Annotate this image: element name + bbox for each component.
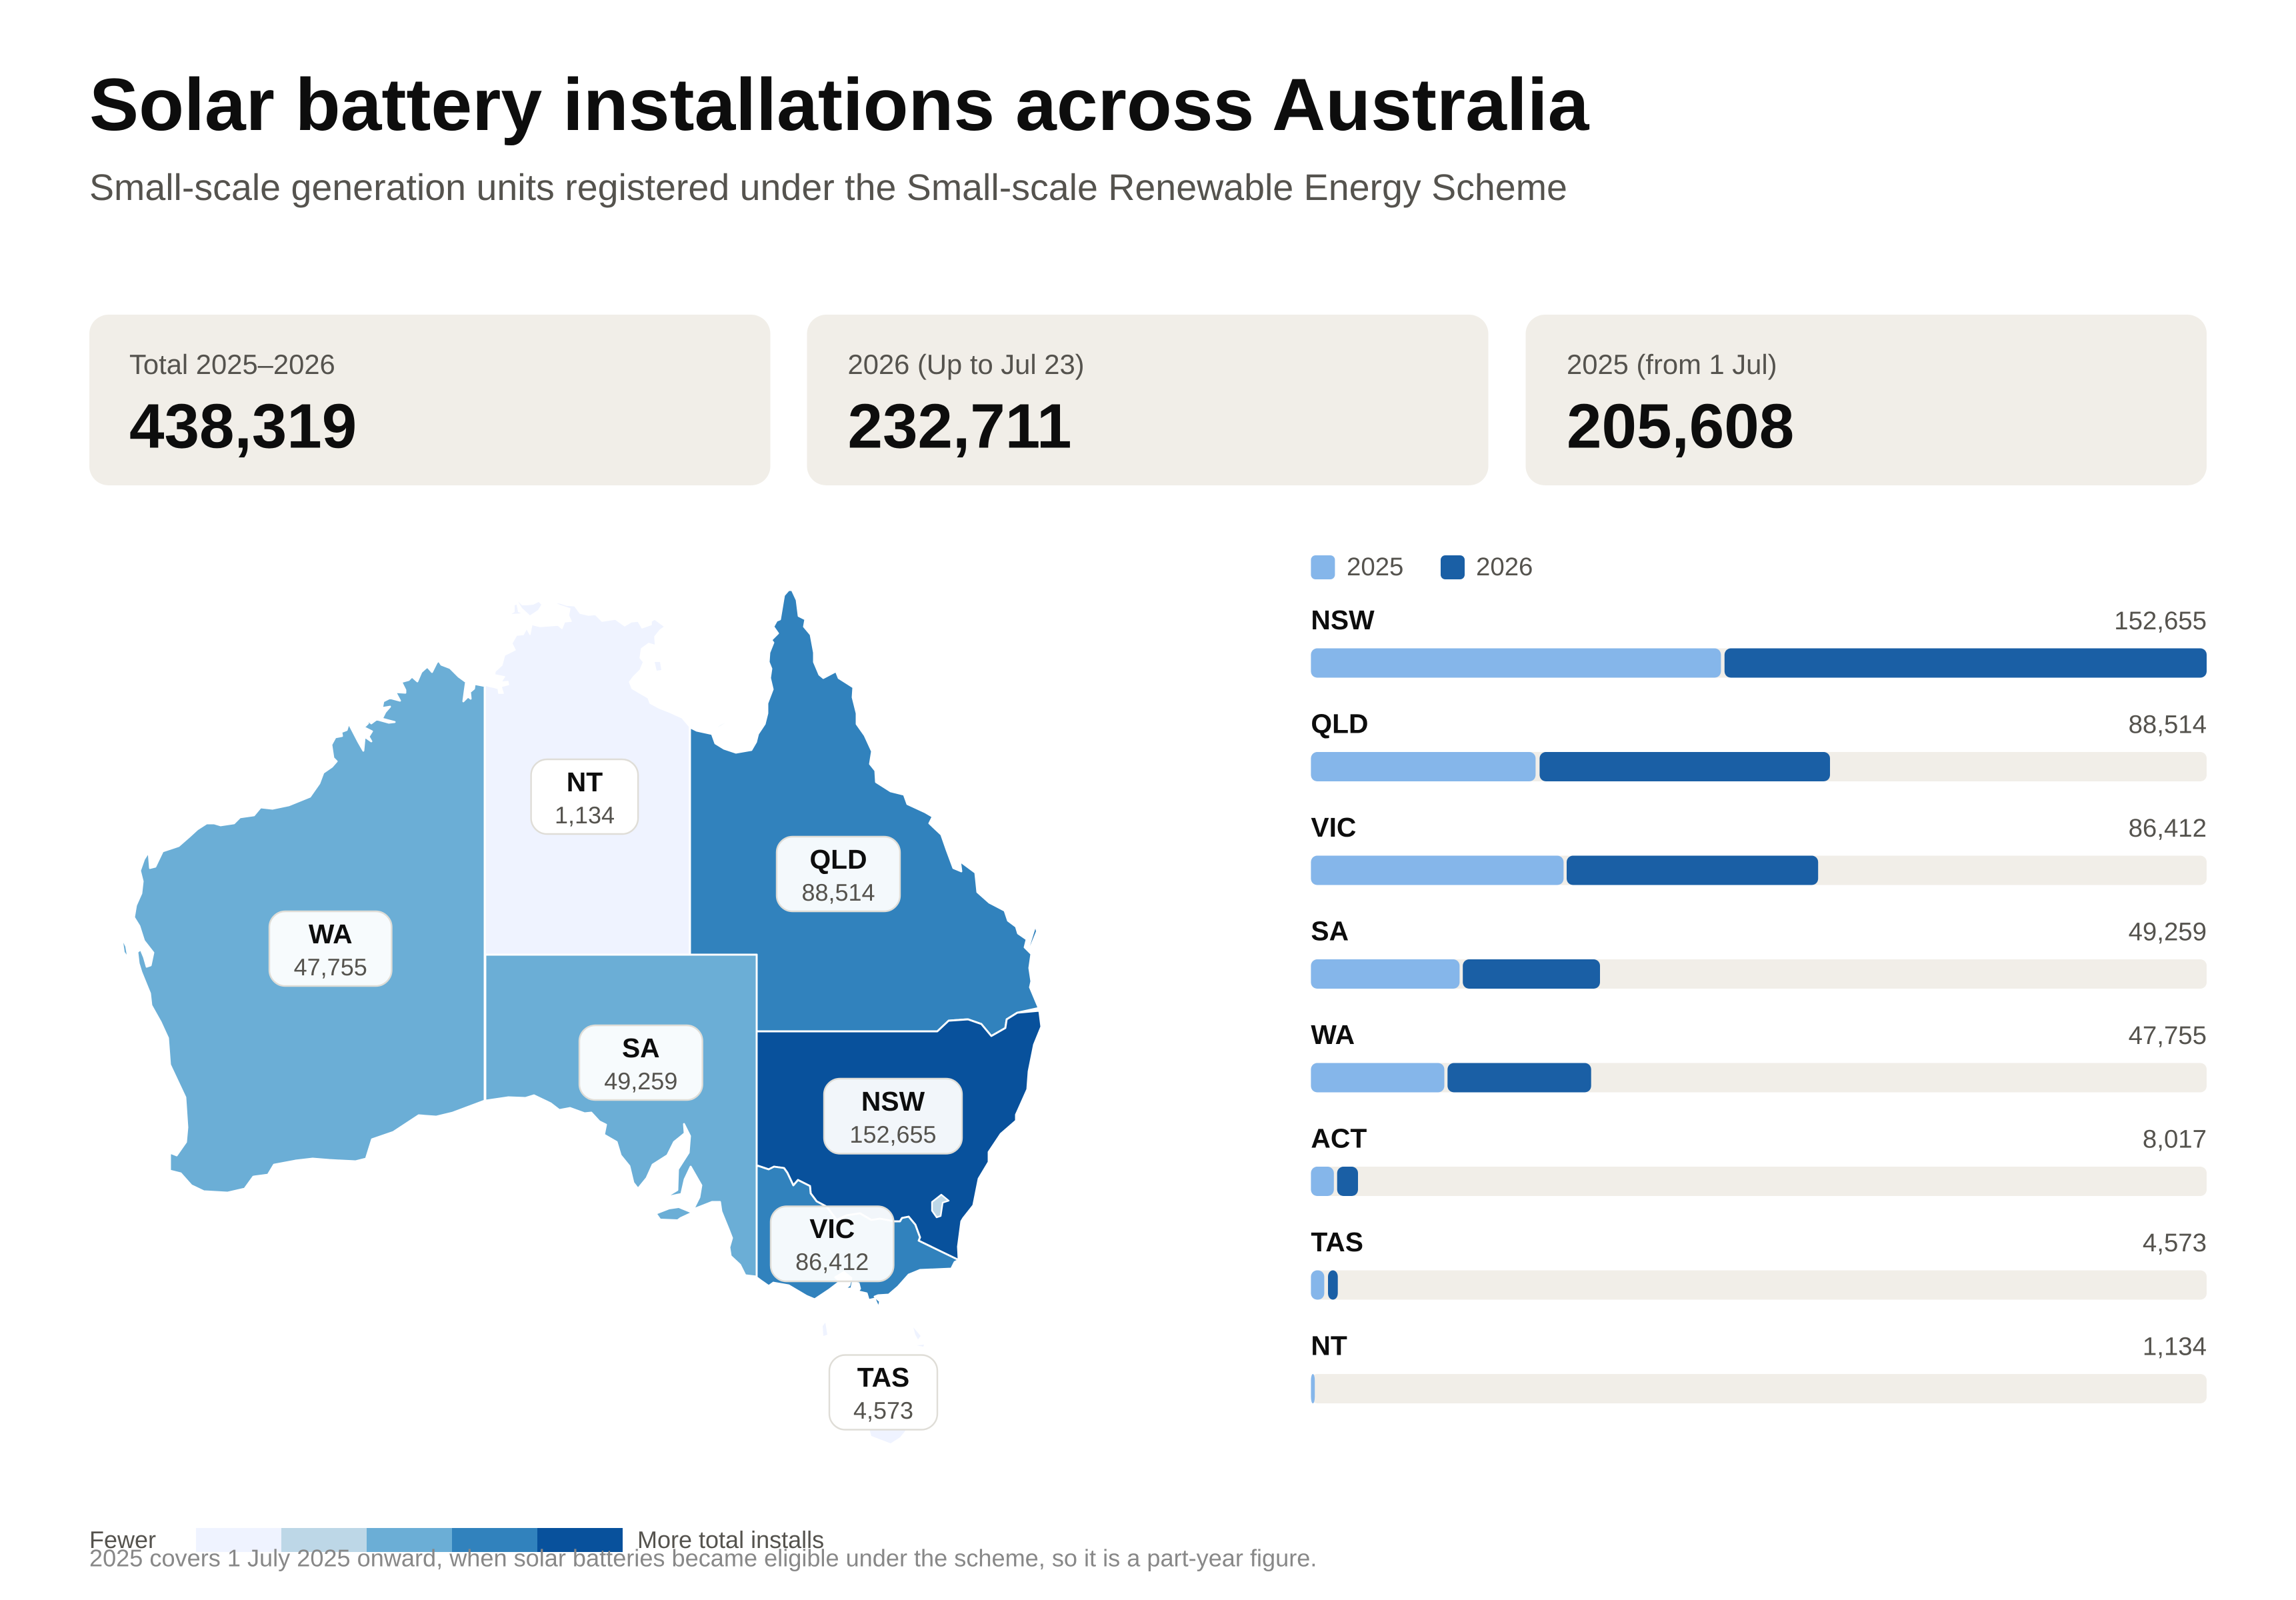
map label: VIC: 86,412 — [795, 1248, 869, 1275]
bar row: QLD: 88,514 — [2129, 711, 2207, 739]
subtitle: Small-scale generation units registered under the Small-scale Renewable Energy Scheme — [89, 167, 1567, 208]
state: Tasmania — [823, 1323, 930, 1443]
bar row: NT: NT — [1311, 1331, 1347, 1361]
map colour legend: More total installs — [637, 1526, 824, 1553]
bar row: SA — [1311, 916, 2207, 989]
state: Victoria — [757, 1165, 959, 1308]
bar row: TAS — [1311, 1227, 2207, 1300]
map label: NSW: NSW — [861, 1086, 925, 1117]
map label: TAS: TAS — [857, 1362, 909, 1393]
bar row: TAS: 4,573 — [2143, 1229, 2207, 1257]
map label: SA: 49,259 — [604, 1067, 677, 1095]
bar row: WA: 47,755 — [2129, 1021, 2207, 1050]
panel: KPI 2026: 2026 (Up to Jul 23) — [848, 349, 1085, 380]
bar chart legend: 2026 — [1476, 553, 1533, 581]
panel: KPI 2025: 2025 (from 1 Jul) — [1567, 349, 1777, 380]
map label: VIC — [771, 1207, 893, 1281]
bar row: NT — [1311, 1331, 2207, 1403]
panel: KPI total: 438,319 — [129, 392, 357, 461]
map colour legend — [89, 1526, 824, 1553]
map label: NSW — [824, 1079, 962, 1153]
bar row: SA: SA — [1311, 916, 1349, 947]
bar row: TAS: TAS — [1311, 1227, 1363, 1257]
map colour legend: Fewer — [89, 1526, 156, 1553]
map label: TAS: 4,573 — [853, 1397, 913, 1424]
bar row: QLD: QLD — [1311, 708, 1369, 739]
bar row: NSW — [1311, 605, 2207, 677]
bar row: WA: WA — [1311, 1019, 1355, 1050]
map label: NSW: 152,655 — [849, 1121, 937, 1148]
map label: WA: WA — [309, 919, 353, 949]
map label: QLD: QLD — [809, 844, 867, 875]
bar row: SA: 49,259 — [2129, 917, 2207, 947]
state: Western Australia — [123, 661, 485, 1193]
panel: KPI 2026 — [807, 315, 1488, 485]
map label: QLD — [777, 837, 900, 911]
bar row: WA — [1311, 1019, 2207, 1092]
map label: NT: NT — [567, 767, 603, 797]
bar row: ACT: 8,017 — [2143, 1125, 2207, 1153]
map label: NT: 1,134 — [555, 801, 615, 829]
bar row: ACT: ACT — [1311, 1123, 1367, 1153]
map label: SA: SA — [622, 1033, 660, 1063]
bar chart legend — [1311, 553, 1533, 581]
panel: KPI 2025: 205,608 — [1567, 392, 1794, 461]
title: Solar battery installations across Australia — [89, 63, 1590, 146]
bar row: VIC: 86,412 — [2129, 814, 2207, 843]
state: Australian Capital Territory — [932, 1195, 949, 1217]
map label: WA — [269, 911, 392, 986]
bar chart: installs by state — [1311, 605, 2207, 1403]
state: Northern Territory — [485, 601, 689, 955]
panel: KPI total — [89, 315, 771, 485]
panel: KPI 2025 — [1525, 315, 2207, 485]
bar row: NSW: 152,655 — [2114, 607, 2207, 635]
bar row: VIC: VIC — [1311, 812, 1356, 843]
map label: TAS — [829, 1355, 937, 1429]
footnote: 2025 covers 1 July 2025 onward, when solar batteries became eligible under the scheme, so it is a part-year figure. — [89, 1544, 1317, 1572]
bar row: QLD — [1311, 708, 2207, 781]
bar row: NSW: NSW — [1311, 605, 1375, 635]
panel: KPI 2026: 232,711 — [848, 392, 1072, 461]
map label: VIC: VIC — [809, 1213, 855, 1244]
map label: QLD: 88,514 — [801, 879, 875, 906]
map label: SA — [579, 1025, 703, 1100]
map label: NT — [531, 759, 638, 834]
bar row: ACT — [1311, 1123, 2207, 1196]
map label: WA: 47,755 — [294, 953, 367, 981]
bar row: VIC — [1311, 812, 2207, 885]
state: Queensland — [690, 590, 1039, 1036]
bar chart legend: 2025 — [1347, 553, 1403, 581]
state: New South Wales — [757, 1011, 1041, 1260]
panel: KPI total: Total 2025–2026 — [129, 349, 335, 380]
bar row: NT: 1,134 — [2143, 1332, 2207, 1361]
state: South Australia — [485, 955, 757, 1277]
choropleth map of Australia — [123, 590, 1041, 1443]
